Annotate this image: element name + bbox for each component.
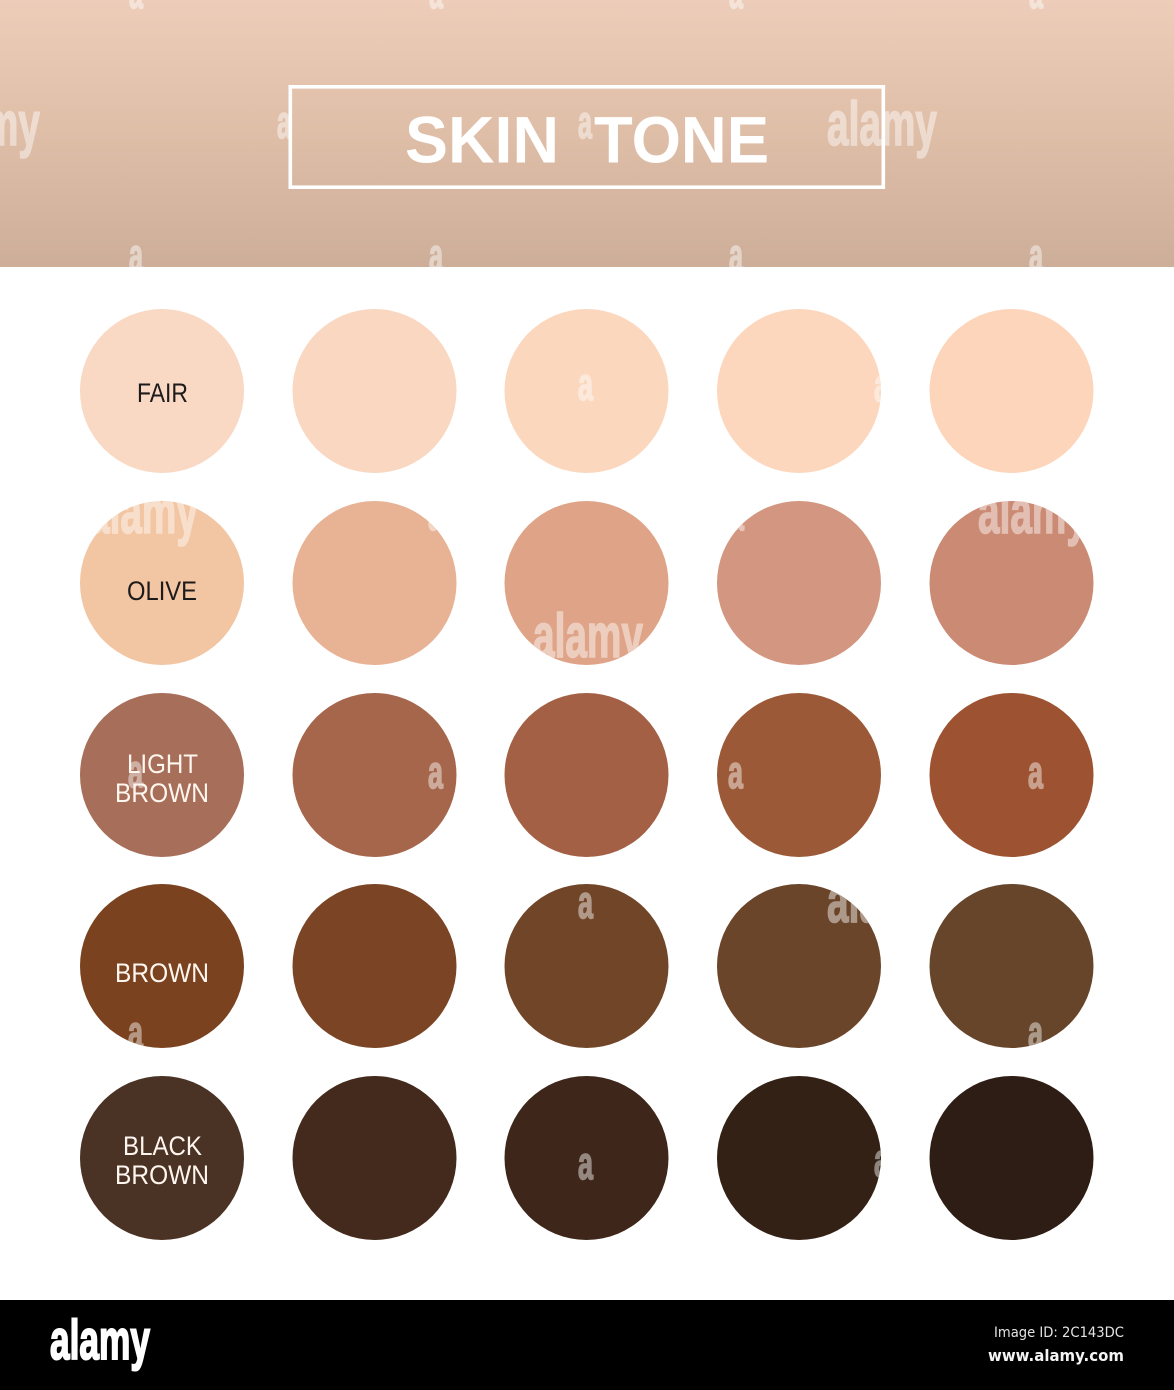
title: SKIN [405,102,559,176]
label: black brown: BROWN [115,1160,209,1190]
label: light brown: BROWN [115,778,209,808]
watermark overlay: a [729,229,743,281]
watermark overlay [0,0,1088,1189]
watermark overlay: a [277,96,291,148]
row: olive tones [80,501,1094,665]
watermark overlay: alamy [827,867,937,936]
label: brown: BROWN [115,958,209,988]
watermark overlay: a [1028,746,1043,798]
watermark overlay: a [128,1006,143,1058]
label: olive: OLIVE [127,576,197,606]
watermark overlay: alamy [978,478,1088,547]
label: black brown: BLACK [123,1131,202,1161]
watermark overlay: alamy [827,90,937,159]
image id: Image ID: 2C143DC [994,1325,1124,1341]
watermark overlay: a [428,488,443,540]
watermark overlay: a [428,746,443,798]
swatch grid [80,309,1094,1240]
title: TONE [594,102,769,176]
label: fair: FAIR [137,378,188,408]
watermark overlay: a [429,229,443,281]
watermark overlay: a [578,1137,593,1189]
footer logo: alamy [50,1308,150,1371]
watermark overlay: a [728,746,743,798]
label: light brown: LIGHT [127,749,198,779]
watermark overlay: alamy [88,478,198,547]
watermark overlay: a [578,96,592,148]
watermark overlay: a [874,1134,889,1186]
panel: header band [0,0,1174,267]
row: brown tones [80,884,1094,1048]
website: www.alamy.com [988,1346,1124,1365]
watermark overlay: a [729,488,744,540]
watermark overlay: a [129,229,143,281]
watermark overlay: alamy [533,602,643,671]
row: fair tones [80,309,1094,473]
watermark overlay: a [1029,229,1043,281]
watermark overlay: a [1028,1006,1043,1058]
row: light brown tones [80,693,1094,857]
title [405,102,769,176]
label: light brown [115,749,209,808]
footer bar [0,1300,1174,1390]
title frame [290,87,883,187]
watermark overlay: a [578,876,593,928]
watermark overlay: a [578,358,593,410]
watermark overlay: a [128,745,143,797]
row: black brown tones [80,1076,1094,1240]
label: black brown [115,1131,209,1190]
watermark overlay: a [874,359,889,411]
